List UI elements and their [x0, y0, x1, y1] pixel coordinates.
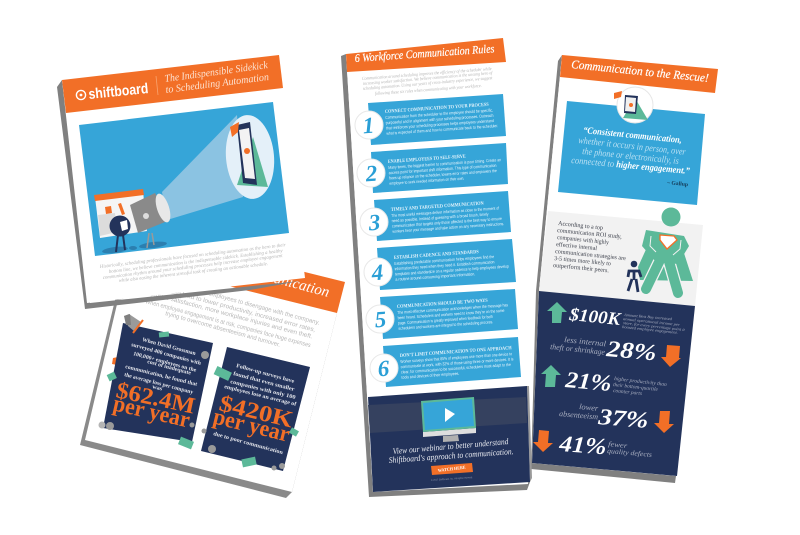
rule 6: tools and devices of their employees.: [401, 371, 459, 380]
rule 4: ESTABLISH CADENCE AND STANDARDS: [394, 250, 479, 261]
sheet 1 orange header: [62, 55, 283, 113]
rule 6: DON'T LIMIT COMMUNICATION TO ONE APPROACH: [400, 346, 512, 359]
sheet 2 orange header: [200, 246, 345, 313]
rule 2: 2: [364, 161, 378, 186]
sheet 4 title: Communication to the Rescue!: [571, 57, 709, 85]
rule 5: The most effective communication acknowledges when the message has: [397, 302, 508, 315]
rule 4: templates and standardize on a regular cadence to help employees develop: [395, 264, 509, 277]
rule 2: ENABLE EMPLOYEES TO SELF-SERVE: [388, 155, 466, 165]
sheet 2 intro text: When employee engagement is at risk, companies face huge expenses: [144, 298, 311, 349]
stat box: 420K per year: employees lose an average of: [224, 384, 297, 408]
stat: 21 percent: higher productivity than: [614, 376, 667, 388]
rule 1: CONNECT COMMUNICATION TO YOUR PROCESS: [385, 103, 489, 115]
stat box: 62.4M per year: 100,000+ employees on the: [132, 351, 197, 374]
sheet 3 intro text: [362, 66, 493, 96]
illustration: green superhero: [638, 208, 693, 293]
sheet 3 title: 6 Workforce Communication Rules: [354, 43, 495, 65]
stat: 28 percent: less internal: [564, 335, 607, 348]
stat: 100K: annual operational income per: [623, 317, 681, 327]
sheet 1 body text: while also easing the inherent stressful task of creating an actionable schedule.: [119, 262, 268, 284]
rule 3: [360, 191, 511, 241]
webinar text: View our webinar to better understand: [392, 436, 509, 456]
illustration: spotlight on phone: [79, 102, 289, 256]
panel: sheet 4 communication to the rescue: [531, 55, 718, 483]
stat: 41 percent: quality defects: [607, 447, 653, 459]
hero paragraph: companies with highly: [557, 234, 610, 246]
rule 6: clear, for communication to be successful, schedulers must adapt to the: [401, 362, 512, 375]
stat box: 420K per year: due to poor communication: [212, 431, 284, 456]
quote text: the phone or electronically, is: [582, 147, 679, 167]
panel: sheet 2 cost of poor communication: [80, 233, 345, 498]
rule 1: Communication from the scheduler to the employee should be specific,: [385, 107, 493, 120]
figure: 420K: $420K: [217, 391, 296, 432]
rule 3: 3: [367, 210, 381, 235]
stat box: 62.4M per year: cost of inadequate: [146, 359, 192, 377]
icon: money and coins: [98, 331, 299, 470]
stat: 37 percent: 37%: [596, 404, 649, 433]
webinar text: Shiftboard's approach to communication.: [388, 446, 514, 465]
stat: 100K: Amount Best Buy increased: [623, 313, 672, 321]
stat box: 62.4M per year: surveyed 400 companies with: [130, 342, 202, 367]
character behind spotlight: [102, 203, 167, 255]
rule 1: what is expected of them and how to communicate back to the scheduler.: [386, 123, 498, 136]
stat: 37 percent: absenteeism: [559, 409, 599, 421]
stat box: 62.4M per year: the average loss per company: [123, 372, 194, 396]
sheet 1 title: The Indispensible Sidekick: [164, 60, 269, 85]
button: watch here: WATCH HERE: [438, 465, 466, 473]
rule 2: Many times, the biggest barrier to communication is poor timing. Create an: [388, 157, 502, 170]
light beam: [162, 115, 243, 220]
rule 3: communication that targets only those affected is the best way to ensure: [392, 216, 503, 229]
stat: 41 percent: fewer: [608, 440, 628, 450]
hero paragraph: [553, 220, 626, 274]
rule 4: Establishing predictable communication helps employees find the: [394, 254, 495, 266]
hero paragraph: communication ROI study,: [557, 227, 623, 241]
label: per year: per year: [111, 391, 192, 432]
rule 2: access point for important shift information. This type of communication: [389, 163, 497, 175]
icon: monitor with play button: [421, 397, 476, 442]
rule 6: 6: [377, 356, 391, 381]
stat: 100K: [547, 302, 686, 335]
rule 5: 5: [374, 307, 387, 332]
logo: shiftboard: shiftboard: [88, 81, 149, 103]
calendar: [94, 189, 147, 238]
sheet 3 intro text: following these six rules when communicating with your workforce.: [375, 83, 482, 96]
sheet 1 body text: bottom line, we believe communication is the indispensable sidekick. Establishing a healthy: [109, 249, 284, 275]
panel: sheet 1 indispensable sidekick: [57, 55, 305, 309]
rule 5: schedulers and workers are integral to the scheduling process.: [398, 319, 493, 331]
quote text: connected to higher engagement.”: [571, 156, 690, 177]
icon: phone in circle: [614, 87, 653, 123]
rule 5: [366, 289, 518, 339]
label: per year: per year: [211, 404, 293, 447]
sheet 1 title: to Scheduling Automation: [165, 72, 270, 96]
rule 5: been heard. Schedulers and workers need to know they're on the same: [398, 308, 505, 320]
hero paragraph: According to a top: [558, 220, 603, 232]
quote text: [571, 125, 690, 177]
rule 1: purposeful and in alignment with your scheduling processes. Outreach: [386, 113, 494, 125]
stat: 41 percent: [533, 430, 653, 459]
hero paragraph: effective internal: [556, 241, 598, 252]
icon: megaphone: [124, 314, 143, 333]
stat: 37 percent: [559, 402, 674, 433]
accent: orange mark: [112, 357, 118, 365]
rule 6: [370, 337, 521, 387]
stat box: 420K per year: found that even smaller: [232, 371, 296, 393]
illustration: small navy person: [628, 261, 641, 292]
webinar footer: [368, 386, 530, 492]
sheet 3 intro text: scheduling automation. Using our years of cross-industry experience, we suggest: [363, 75, 493, 92]
stat: 28 percent: 28%: [604, 336, 658, 365]
quote text: “Consistent communication,: [583, 125, 682, 146]
sheet 1 body text: communication rhythm around your scheduling processes help increase employee engagement: [103, 254, 284, 281]
spotlight lamp: [130, 192, 173, 248]
webinar text: [388, 436, 514, 465]
rule 1: 1: [362, 113, 375, 138]
stat box: 62.4M per year: was: [152, 384, 164, 393]
panel: sheet 3 six workforce communication rules: [341, 38, 532, 497]
sheet 3 orange header: [346, 38, 506, 72]
rule 5: COMMUNICATION SHOULD BE TWO WAYS: [397, 299, 488, 310]
rule 4: a routine around consuming important information.: [395, 271, 475, 282]
stat: 28 percent: theft or shrinkage: [550, 342, 606, 357]
rule 3: TIMELY AND TARGETED COMMUNICATION: [391, 201, 484, 213]
hero panel: [539, 208, 703, 306]
stat: 28 percent: [550, 335, 681, 367]
hero paragraph: communication strategies are: [555, 248, 626, 262]
rule 2: [357, 143, 508, 193]
sheet 2 intro text: trying to overcome absenteeism and turnover.: [164, 310, 281, 349]
rule 2: employee to seek needed information on their own.: [389, 176, 464, 186]
rule 6: Worker surveys show that 85% of employees use more than one device to: [400, 351, 513, 364]
navy stats panel: [532, 291, 695, 476]
stat: 100K: store, for every percentage point it: [623, 321, 686, 333]
stat: 100K: boosted employee engagement.: [622, 325, 678, 335]
stat: 21 percent: their bottom-quartile: [613, 382, 659, 393]
rule 3: The most useful messages deliver information as close to the moment of: [391, 205, 500, 218]
stat: 37 percent: lower: [579, 402, 600, 413]
sheet 2 intro text: can lead to lower productivity, increased error rates,: [169, 288, 316, 334]
sheet 3 intro text: increasing worker satisfaction. We believe communication is the unsung hero of: [363, 70, 493, 86]
rule 2: frees up reliance on the scheduler, lowers error rates and empowers the: [389, 168, 498, 181]
stat box: 62.4M per year: When David Grossman: [141, 337, 197, 357]
stat box: 420K per year: Follow-up surveys have: [235, 363, 295, 385]
quote panel: [558, 87, 705, 205]
rule 4: [364, 239, 516, 290]
sheet 1 body text: [99, 243, 286, 284]
figure: 62.4M: $62.4M: [114, 377, 198, 419]
stat: 100K: $100K: [568, 304, 623, 329]
rule 4: 4: [370, 260, 384, 285]
sheet 4 orange header: [560, 55, 718, 93]
stat box: 420K per year: [201, 347, 310, 471]
rule 3: need as possible. Instead of guessing with a broad brush, timely: [392, 211, 489, 223]
stat box: 420K per year: companies with only 100: [230, 379, 296, 401]
copyright: © 2017 Shiftboard, Inc. All rights reserved.: [431, 476, 473, 482]
sheet 1 body text: Historically, scheduling professionals have focused on scheduling automation as the hero to their: [99, 243, 286, 270]
sheet 1 title: [156, 60, 270, 96]
sheet 2 intro text: employees to disengage with the company.: [207, 290, 321, 327]
quote attribution: – Gallup: [666, 180, 688, 188]
rule 3: workers hear your message and take action on any necessary instructions.: [392, 221, 504, 234]
rule 5: page. Communication is greatly improved when feedback for both: [398, 314, 494, 326]
quote text: whether it occurs in person, over: [578, 136, 686, 158]
sheet 3 intro text: Communication around scheduling improves the efficiency of the scheduler while: [362, 66, 492, 81]
stat box: 62.4M per year: communication, he found that: [125, 364, 198, 388]
button: watch here: [431, 463, 473, 475]
stat: 41 percent: 41%: [558, 431, 607, 459]
stat: 21 percent: [541, 365, 667, 397]
rule 1: [355, 94, 506, 145]
rule 6: communicate at work, with 32% of those using three or more devices. It is: [401, 356, 514, 369]
stat: 21 percent: 21%: [563, 367, 613, 396]
sheet 2 heading: The Cost of Poor Communication: [131, 233, 331, 301]
rule 1: that reinforces your scheduling processes helps employees understand: [386, 118, 495, 131]
spotlight circle with phone: [222, 113, 278, 201]
hero paragraph: outperform their peers.: [553, 262, 610, 274]
stat box: 62.4M per year: [103, 323, 213, 442]
stat: 21 percent: counter parts: [613, 388, 642, 397]
rule 4: information they need when they need it. Establish communication: [395, 259, 495, 271]
hero paragraph: 3-5 times more likely to: [554, 255, 611, 267]
sheet 2 intro text: employee satisfaction, more workplace injuries and even theft.: [141, 288, 314, 341]
